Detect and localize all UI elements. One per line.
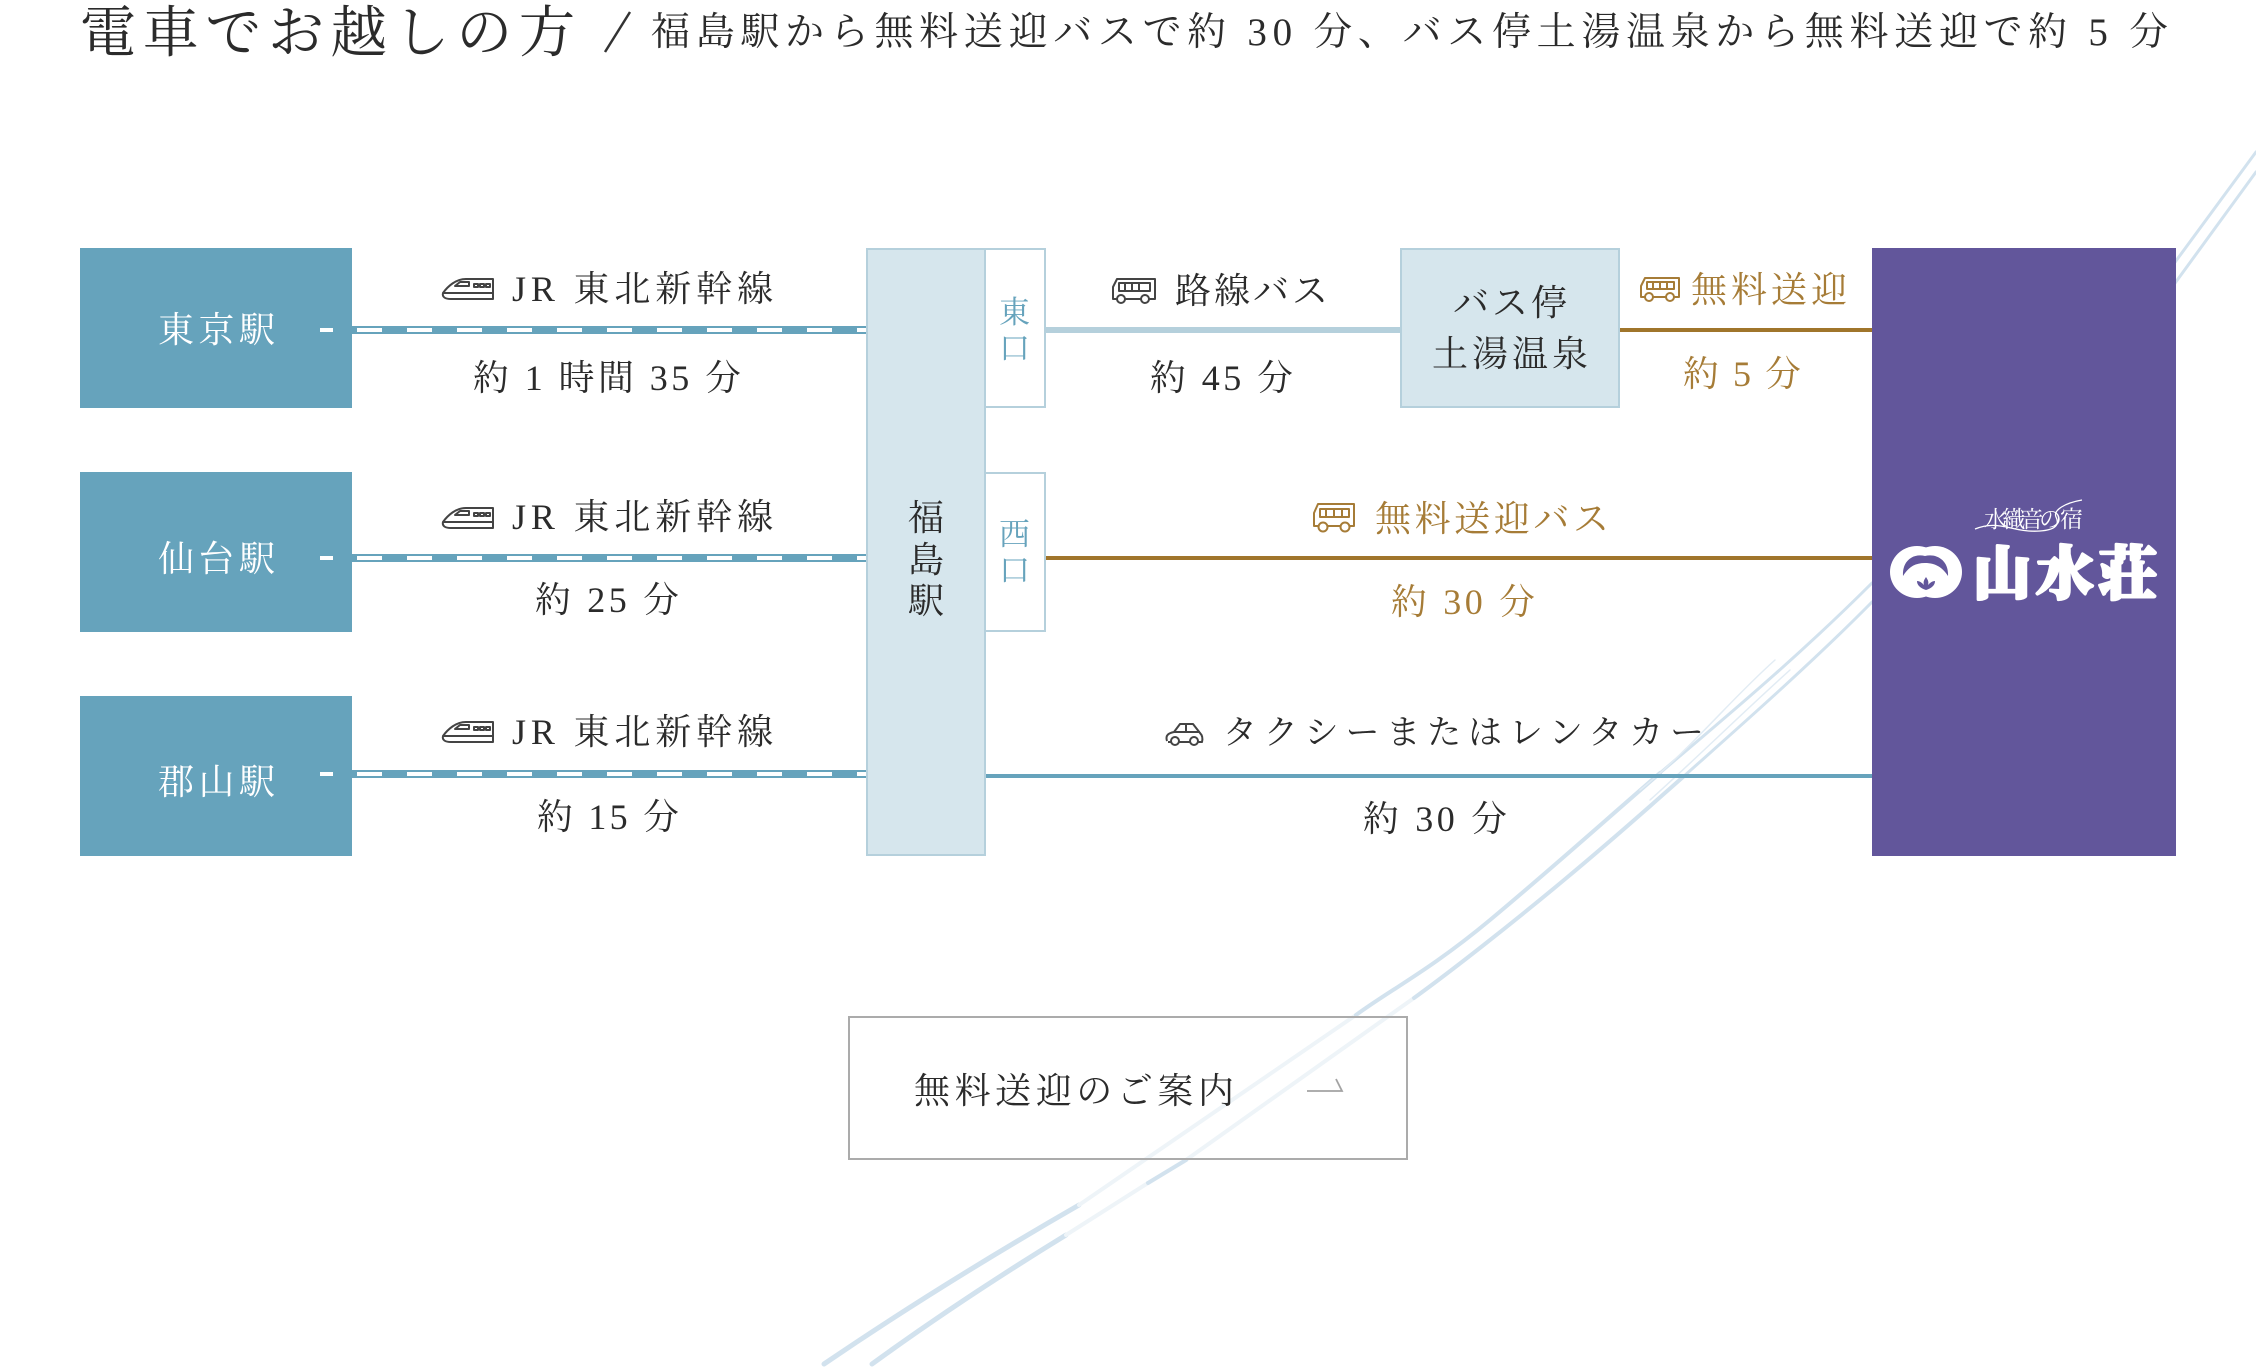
route label: free shuttle bus: 約 30 分 [1391,582,1535,622]
decorative brush strokes [824,152,2256,1364]
icon: gold bus [1641,278,1679,301]
route label: free shuttle bus [1314,499,1609,622]
station: Tokyo [80,248,352,408]
icon: shinkansen [443,279,493,299]
east exit [985,249,1045,407]
title: 電車でお越しの方 [80,3,575,65]
subtitle: 福島駅から無料送迎バスで約 30 分、バス停土湯温泉から無料送迎で約 5 分 [651,11,2168,54]
east exit: 東 [999,295,1030,330]
line: Sendai shinkansen [352,554,867,562]
line: Tokyo shinkansen [352,326,867,334]
route label: taxi or rental car: タクシーまたはレンタカー [1223,715,1704,752]
destination panel: Sansuiso [1872,248,2176,856]
line: free shuttle bus [1045,556,1872,560]
route label: Tokyo shinkansen: JR 東北新幹線 [512,269,773,309]
Fukushima station: 駅 [907,581,944,621]
station: Koriyama: 郡山駅 [158,762,275,802]
button: free shuttle information: 無料送迎のご案内 [914,1071,1234,1111]
route label: free shuttle bus: 無料送迎バス [1375,499,1609,539]
station: Sendai [80,472,352,632]
bus stop Tsuchiyu Onsen [1401,249,1619,407]
icon: car [1166,724,1202,745]
route label: taxi or rental car [1166,715,1704,839]
logo wordmark: 山水荘 [1973,527,2157,611]
icon: shinkansen [443,722,493,742]
route label: Koriyama shinkansen: JR 東北新幹線 [512,712,773,752]
west exit [985,473,1045,631]
route label: route bus: 路線バス [1175,271,1328,311]
icon: shinkansen [443,508,493,528]
east exit: 口 [999,331,1030,366]
station: Koriyama [80,696,352,856]
route label: route bus [1113,271,1328,398]
west exit: 口 [999,553,1030,588]
logo emblem [1890,546,1962,598]
route lines [352,326,1872,778]
route label: Tokyo shinkansen: 約 1 時間 35 分 [473,358,741,398]
bus stop Tsuchiyu Onsen: 土湯温泉 [1432,334,1588,374]
icon: gold bus [1314,504,1354,532]
bus stop Tsuchiyu Onsen: バス停 [1453,283,1567,323]
slash divider [605,12,630,52]
line: taxi or rental car [985,774,1872,778]
line: free shuttle from bus stop [1619,328,1872,332]
logo tagline: 宿 [2060,507,2083,532]
Fukushima station: 島 [908,540,944,580]
route label: route bus: 約 45 分 [1150,358,1293,398]
route label: Koriyama shinkansen: 約 15 分 [537,797,679,837]
route label: Tokyo shinkansen [443,269,773,398]
west exit: 西 [999,517,1030,552]
line: Koriyama shinkansen [352,770,867,778]
line: route bus [1045,327,1401,333]
route label: Sendai shinkansen: 約 25 分 [535,580,679,620]
station: Tokyo: 東京駅 [158,310,275,350]
button: free shuttle information [849,1017,1407,1159]
route label: free shuttle from bus stop: 約 5 分 [1683,354,1801,394]
route label: Sendai shinkansen [443,497,773,620]
route label: free shuttle from bus stop: 無料送迎 [1691,270,1847,310]
route label: taxi or rental car: 約 30 分 [1363,799,1507,839]
route label: free shuttle from bus stop [1641,270,1847,394]
Fukushima station: 福 [908,498,944,538]
station: Sendai: 仙台駅 [158,539,275,579]
Fukushima station [867,249,985,855]
logo tagline: 水織音の [1984,507,2062,532]
route label: Koriyama shinkansen [443,712,773,837]
icon: arrow [1307,1079,1342,1091]
logo tagline [1975,500,2083,532]
icon: bus [1113,279,1155,303]
route label: Sendai shinkansen: JR 東北新幹線 [512,497,773,537]
